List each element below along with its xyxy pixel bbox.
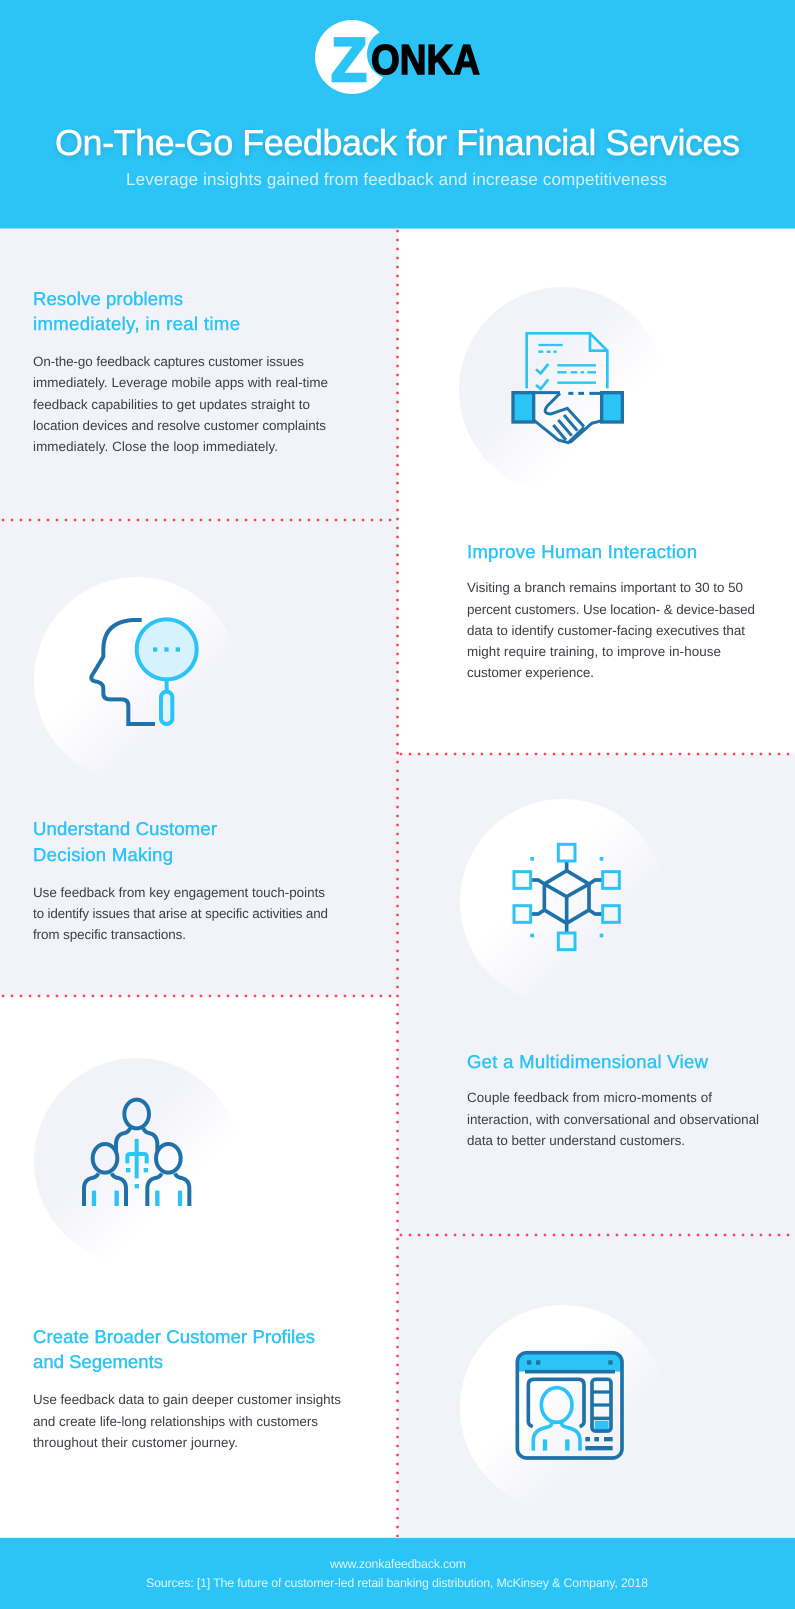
text: resolve problems body: On-the-go feedback captures customer issues [33, 354, 304, 369]
icon backdrop circle: people [34, 1058, 240, 1264]
text: broader customer profiles body: throughout their customer journey. [33, 1435, 238, 1450]
header band [0, 0, 795, 229]
heading: resolve problems [33, 288, 240, 334]
footer band [0, 1537, 795, 1609]
heading: resolve problems: Resolve problems [33, 288, 183, 309]
text: multidimensional view body: Couple feedback from micro-moments of [467, 1090, 712, 1105]
heading: understand customer [33, 818, 217, 865]
subtitle: Leverage insights gained from feedback and increase competitiveness [126, 170, 667, 189]
panel: resolve problems [0, 228, 398, 520]
text: multidimensional view body: interaction, with conversational and observational [467, 1112, 759, 1127]
panel: improve human interaction [398, 228, 795, 754]
text: broader customer profiles body [33, 1392, 341, 1450]
text: understand customer body: to identify issues that arise at specific activities and [33, 906, 328, 921]
text: improve human interaction body: might require training, to improve in-house [467, 644, 721, 659]
text: resolve problems body [33, 354, 328, 454]
icon backdrop circle: cube [460, 799, 666, 1005]
title: On-The-Go Feedback for Financial Services [55, 122, 740, 163]
text: understand customer body: Use feedback from key engagement touch-points [33, 885, 325, 900]
text: understand customer body [33, 885, 328, 942]
icon: network cube [514, 844, 619, 950]
icon backdrop circle: head [34, 577, 240, 783]
icon: head with magnifier [91, 619, 197, 724]
icon backdrop circle: window [460, 1305, 666, 1511]
text: broader customer profiles body: Use feedback data to gain deeper customer insights [33, 1392, 341, 1407]
text: improve human interaction body: customer experience. [467, 665, 594, 680]
text: multidimensional view body [467, 1090, 759, 1148]
icon backdrop circle: handshake [459, 287, 665, 493]
text: resolve problems body: immediately. Close the loop immediately. [33, 439, 278, 454]
text: resolve problems body: location devices and resolve customer complaints [33, 418, 326, 433]
heading: resolve problems: immediately, in real time [33, 313, 240, 334]
footer: sources: Sources: [1] The future of customer-led retail banking distribution, McKinsey & Company, 2018 [146, 1576, 648, 1590]
text: improve human interaction body: data to identify customer-facing executives that [467, 623, 745, 638]
heading: understand customer: Understand Customer [33, 818, 217, 839]
heading: broader customer profiles [33, 1326, 315, 1372]
text: resolve problems body: immediately. Leverage mobile apps with real-time [33, 375, 328, 390]
panel: multidimensional view [398, 754, 795, 1235]
panel: understand customer decision making [0, 520, 398, 996]
text: resolve problems body: feedback capabilities to get updates straight to [33, 397, 310, 412]
logo: Zonka: ONKA [371, 36, 480, 83]
heading: multidimensional view: Get a Multidimensional View [467, 1051, 709, 1072]
heading: broader customer profiles: and Segements [33, 1351, 163, 1372]
logo: Zonka [315, 20, 480, 95]
icon: document and handshake [513, 333, 622, 443]
panel: broader customer profiles [0, 996, 398, 1538]
text: improve human interaction body: percent customers. Use location- & device-based [467, 602, 755, 617]
icon: browser window with profile [517, 1353, 622, 1458]
heading: improve human interaction: Improve Human Interaction [467, 541, 697, 562]
footer: website: www.zonkafeedback.com [329, 1557, 466, 1571]
icon: three people [84, 1100, 189, 1206]
text: broader customer profiles body: and create life-long relationships with customers [33, 1414, 318, 1429]
text: understand customer body: from specific transactions. [33, 927, 186, 942]
text: improve human interaction body [467, 580, 755, 680]
logo: Zonka: Z [331, 26, 367, 95]
heading: understand customer: Decision Making [33, 844, 173, 865]
text: improve human interaction body: Visiting a branch remains important to 30 to 50 [467, 580, 743, 595]
heading: broader customer profiles: Create Broader Customer Profiles [33, 1326, 315, 1347]
panel: profile window icon [398, 1235, 795, 1538]
text: multidimensional view body: data to better understand customers. [467, 1133, 685, 1148]
